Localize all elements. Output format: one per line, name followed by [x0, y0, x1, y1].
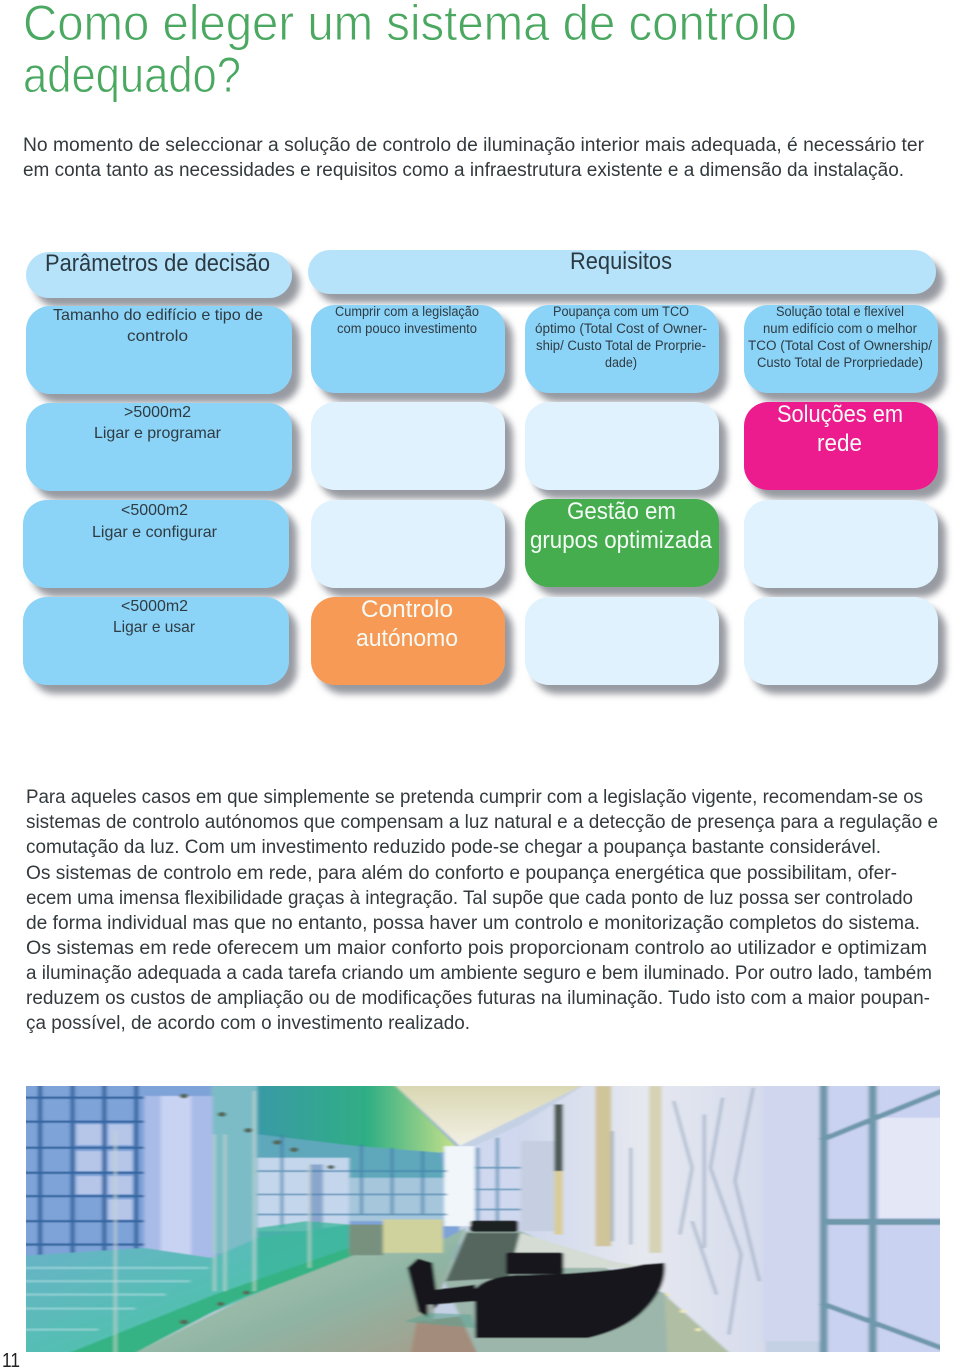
row label: under 5000 m2 use: Ligar e usar	[113, 619, 196, 636]
empty cell	[525, 402, 719, 490]
row label: over 5000 m2: Ligar e programar	[94, 425, 222, 442]
requirement: optimal TCO savings: óptimo (Total Cost of Owner-	[535, 321, 707, 336]
body text: ecem uma imensa flexibilidade graças à integração. Tal supõe que cada ponto de luz possa ser controlado	[26, 888, 913, 909]
solution: optimized group management: Gestão em	[567, 498, 676, 525]
solution: autonomous control: autónomo	[356, 625, 458, 652]
empty cell	[744, 597, 938, 685]
empty cell	[311, 500, 505, 588]
body text	[26, 787, 938, 1034]
row label: under 5000 m2 use	[23, 597, 289, 685]
row label: under 5000 m2 configure: <5000m2	[121, 502, 188, 519]
solution: optimized group management	[525, 498, 719, 587]
solution: network	[744, 401, 938, 490]
requirement: total flexible solution: num edifício com o melhor	[763, 321, 917, 336]
row label: under 5000 m2 configure	[23, 500, 289, 588]
body text: reduzem os custos de ampliação ou de modificações futuras na iluminação. Tudo isto com a maior poupan-	[26, 988, 930, 1009]
body text: Para aqueles casos em que simplemente se pretenda cumprir com a legislação vigente, recomendam-se os	[26, 787, 923, 808]
row label: building size: Tamanho do edifício e tipo de	[53, 307, 263, 324]
decision table	[23, 248, 938, 685]
empty cell	[525, 597, 719, 685]
row label: building size: controlo	[127, 328, 188, 345]
title	[23, 0, 797, 103]
solution: network: Soluções em	[777, 401, 903, 428]
photo: office lobby with glass walls and black sofas	[26, 1086, 940, 1352]
header: Requisitos: Requisitos	[570, 248, 672, 275]
body text: sistemas de controlo autónomos que compensam a luz natural e a detecção de presença para a regulação e	[26, 812, 938, 833]
title: adequado?	[23, 47, 241, 103]
solution: autonomous control	[311, 596, 505, 685]
requirement: legislation: Cumprir com a legislação	[335, 304, 479, 319]
requirement: legislation: com pouco investimento	[337, 321, 477, 336]
solution: network: rede	[817, 430, 862, 457]
requirement: total flexible solution	[744, 304, 938, 393]
requirement: total flexible solution: Custo Total de Prorpriedade)	[757, 355, 923, 370]
row label: building size	[26, 306, 292, 394]
header: Parâmetros de decisão	[26, 250, 292, 298]
body text: ça possível, de acordo com o investimento realizado.	[26, 1013, 470, 1034]
requirement: optimal TCO savings: ship/ Custo Total de Prorprie-	[536, 338, 706, 353]
header: Requisitos	[308, 248, 936, 294]
body text: a iluminação adequada a cada tarefa criando um ambiente seguro e bem iluminado. Por outro lado, também	[26, 963, 932, 984]
row label: under 5000 m2 configure: Ligar e configurar	[92, 524, 218, 541]
requirement: optimal TCO savings: dade)	[605, 355, 637, 370]
body text: Os sistemas em rede oferecem um maior conforto pois proporcionam controlo ao utilizador e optimizam	[26, 938, 927, 959]
row label: over 5000 m2	[26, 403, 292, 491]
body text: comutação da luz. Com um investimento reduzido pode-se chegar a poupança bastante considerável.	[26, 837, 881, 858]
empty cell	[744, 500, 938, 588]
requirement: legislation	[311, 304, 505, 393]
header: Parâmetros de decisão: Parâmetros de decisão	[45, 250, 270, 277]
empty cell	[311, 402, 505, 490]
requirement: optimal TCO savings	[525, 304, 719, 393]
row label: under 5000 m2 use: <5000m2	[121, 598, 188, 615]
intro text: em conta tanto as necessidades e requisitos como a infraestrutura existente e a dimensão da instalação.	[23, 160, 904, 181]
body text: Os sistemas de controlo em rede, para além do conforto e poupança energética que possibilitam, ofer-	[26, 863, 897, 884]
solution: optimized group management: grupos optimizada	[530, 527, 713, 554]
row label: over 5000 m2: >5000m2	[124, 404, 191, 421]
requirement: optimal TCO savings: Poupança com um TCO	[553, 304, 689, 319]
body text: de forma individual mas que no entanto, possa haver um controlo e monitorização completos do sistema.	[26, 913, 920, 934]
intro text: No momento de seleccionar a solução de controlo de iluminação interior mais adequada, é necessário ter	[23, 135, 925, 156]
requirement: total flexible solution: Solução total e flexível	[776, 304, 904, 319]
solution: autonomous control: Controlo	[361, 596, 453, 623]
requirement: total flexible solution: TCO (Total Cost of Ownership/	[748, 338, 932, 353]
intro text	[23, 135, 925, 181]
